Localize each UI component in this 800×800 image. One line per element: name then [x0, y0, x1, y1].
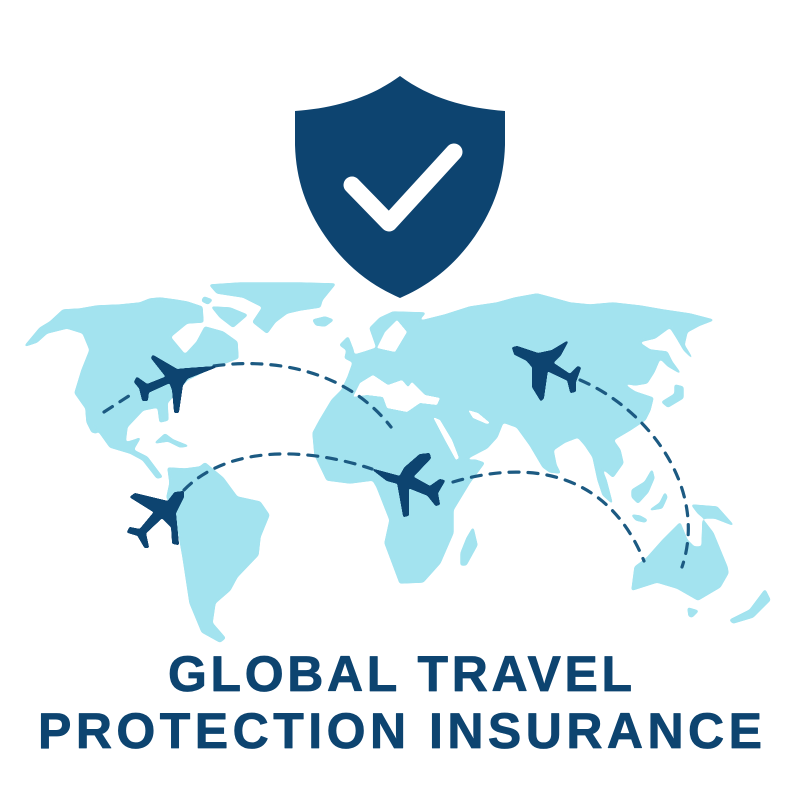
Java — [632, 515, 647, 522]
North America — [25, 298, 238, 478]
plane over Africa — [374, 454, 444, 516]
route: North America to Mediterranean — [104, 364, 391, 427]
Australia — [632, 520, 728, 600]
Madagascar — [461, 528, 477, 565]
plane over South America — [128, 492, 183, 547]
Arctic island — [202, 297, 212, 304]
Borneo — [632, 470, 654, 503]
Baja California — [86, 410, 97, 433]
route: Africa to Australia — [453, 472, 644, 561]
Iceland — [313, 317, 333, 326]
Red Sea — [433, 417, 459, 460]
world map — [25, 283, 770, 642]
Mediterranean Sea — [353, 375, 440, 412]
route: Asia to Australia — [580, 380, 688, 567]
South America — [167, 463, 269, 642]
plane over Asia — [513, 342, 580, 400]
New Guinea — [692, 505, 733, 525]
title line 1: GLOBAL TRAVEL — [168, 646, 632, 702]
Cuba — [155, 434, 188, 447]
title line 2: PROTECTION INSURANCE — [38, 703, 762, 759]
plane over North America — [135, 356, 215, 412]
Eurasia and Africa — [313, 294, 713, 583]
icon: shield with checkmark — [295, 76, 505, 298]
Japan — [662, 385, 683, 407]
Persian Gulf — [468, 410, 490, 424]
Tasmania — [688, 608, 698, 617]
Greenland — [210, 283, 335, 333]
airplanes — [128, 342, 580, 547]
title — [38, 646, 762, 759]
Philippines — [650, 493, 667, 510]
Baltic Sea — [377, 320, 407, 352]
New Zealand — [730, 590, 770, 623]
Great Britain — [340, 337, 355, 363]
route: South America to Africa — [184, 454, 372, 490]
flight routes — [104, 364, 688, 567]
inland seas — [353, 320, 490, 460]
Baffin Island — [212, 307, 247, 327]
